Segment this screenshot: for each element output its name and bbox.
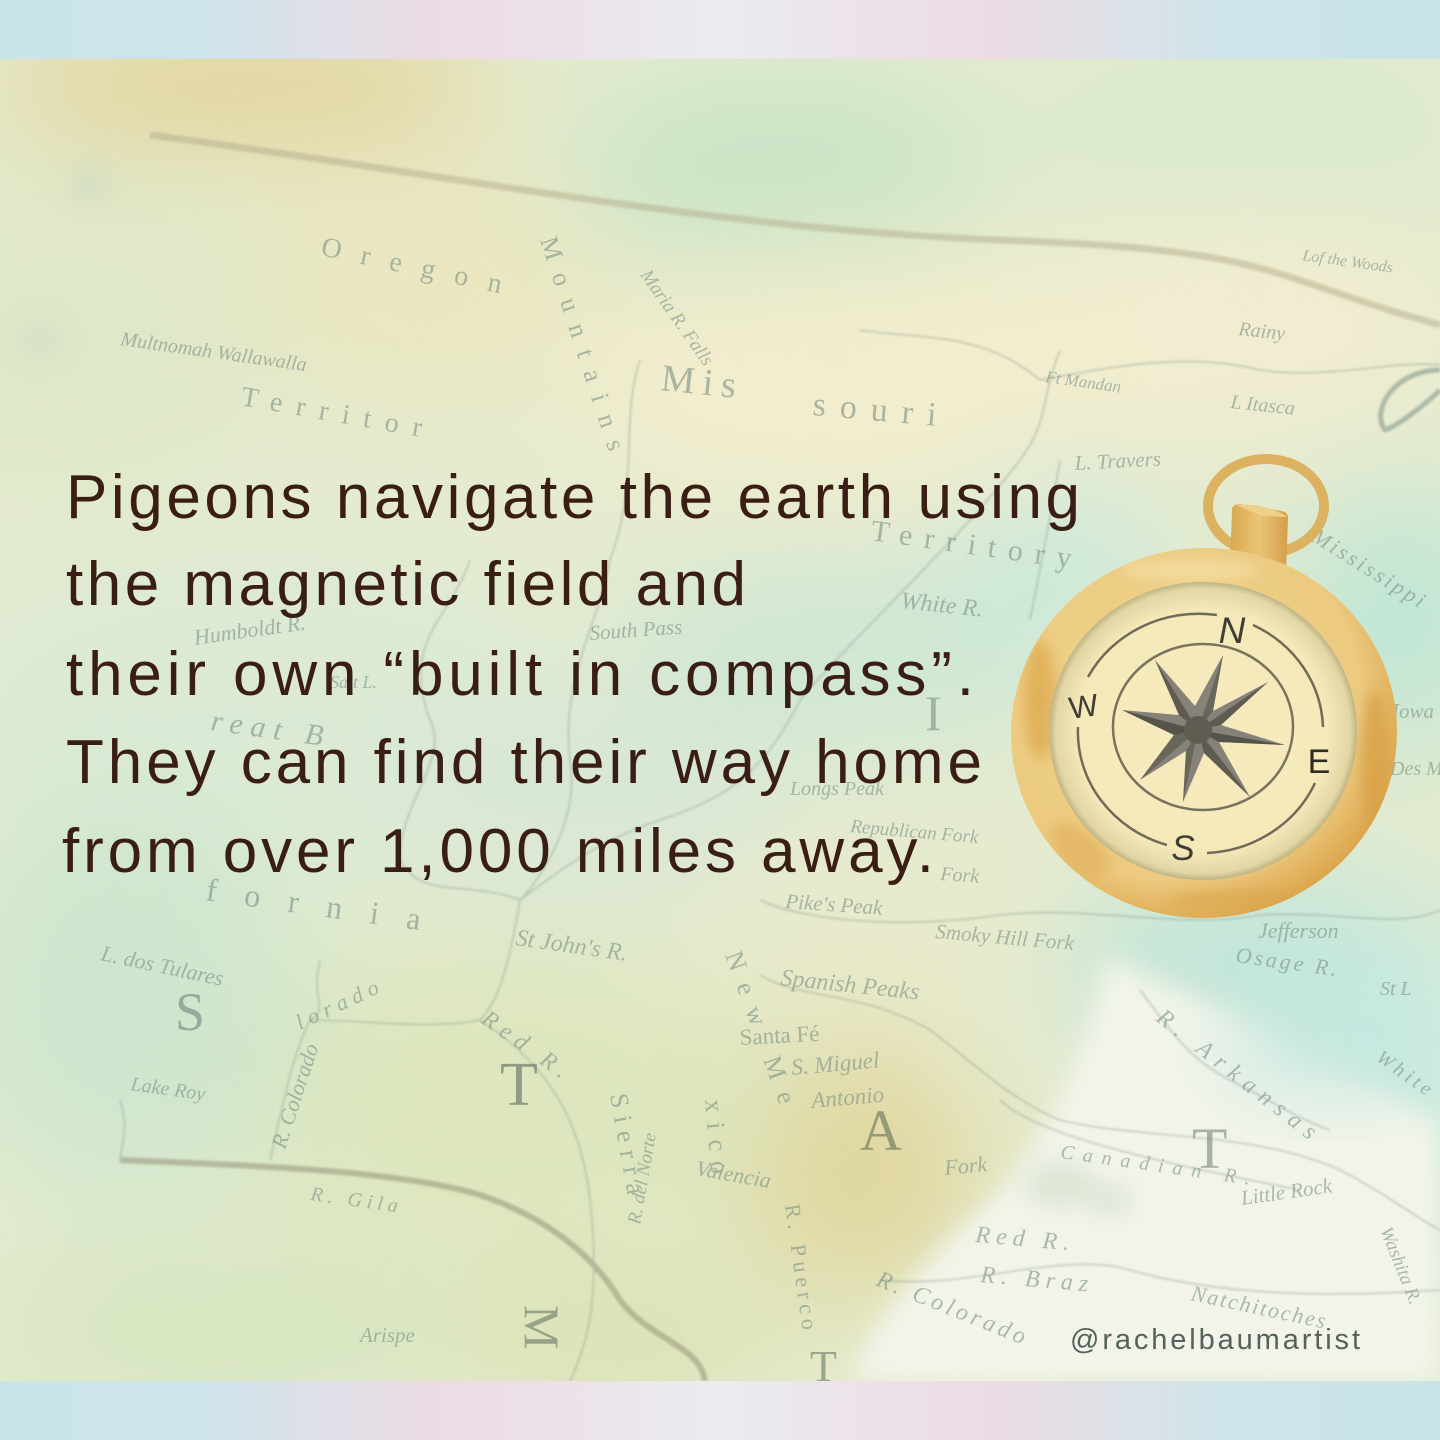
bottom gradient band xyxy=(0,1381,1440,1440)
map labels: R. Puerco xyxy=(780,1202,823,1336)
map labels: Salt L. xyxy=(330,672,377,692)
main text block: their own “built in compass”. xyxy=(66,640,974,709)
map labels: L Itasca xyxy=(1228,391,1296,420)
compass ring xyxy=(1208,459,1324,553)
map labels: Smoky Hill Fork xyxy=(935,919,1076,955)
map labels: S. Miguel xyxy=(790,1047,880,1080)
artist credit: @rachelbaumartist xyxy=(1070,1324,1360,1356)
map labels: Sierra xyxy=(604,1091,652,1204)
map labels: Santa Fé xyxy=(739,1021,820,1050)
map labels: I xyxy=(925,685,942,741)
map labels: R. Braz xyxy=(978,1262,1095,1298)
map labels: Maria R. Falls xyxy=(635,265,718,370)
map labels: R. Colorado xyxy=(266,1040,323,1152)
map labels: Ft Mandan xyxy=(1043,367,1122,397)
map labels: Mountains xyxy=(534,233,635,467)
map labels: T xyxy=(810,1342,837,1391)
compass case xyxy=(999,535,1409,931)
map labels: S xyxy=(175,982,205,1042)
map labels: Antonio xyxy=(808,1082,885,1113)
compass letter W: W xyxy=(1067,687,1101,726)
map labels: Washita R. xyxy=(1375,1224,1425,1308)
map labels: M xyxy=(514,1305,570,1349)
compass stem xyxy=(1230,504,1288,570)
map labels: Natchitoches xyxy=(1188,1280,1330,1334)
map labels xyxy=(98,232,1440,1391)
map labels: Pike's Peak xyxy=(784,889,884,920)
map labels: Canadian R. xyxy=(1059,1141,1261,1191)
top gradient band xyxy=(0,0,1440,59)
map labels: R. del Norte xyxy=(624,1131,661,1227)
compass case mottling xyxy=(1024,560,1389,910)
map labels: Mississippi xyxy=(1307,523,1433,614)
map labels: xico xyxy=(699,1098,735,1185)
map labels: Lof the Woods xyxy=(1300,247,1394,277)
compass letter N: N xyxy=(1219,610,1246,651)
map labels: South Pass xyxy=(589,615,683,645)
map labels: reat B xyxy=(209,704,333,754)
compass inner circle xyxy=(1113,644,1293,810)
white paper wash xyxy=(850,955,1440,1381)
main text block: They can find their way home xyxy=(66,728,982,797)
map labels: T xyxy=(500,1051,538,1119)
map labels: Multnomah Wallawalla xyxy=(118,328,308,376)
map labels: Humboldt R. xyxy=(191,610,307,650)
map labels: St John's R. xyxy=(514,925,629,967)
map labels: R. Arkansas xyxy=(1151,1004,1328,1150)
main text block: the magnetic field and xyxy=(66,550,746,619)
compass face xyxy=(1049,582,1357,880)
map labels: Red R. xyxy=(476,1005,578,1088)
map labels: R. Colorado xyxy=(872,1266,1033,1352)
map labels: A xyxy=(860,1098,902,1163)
map labels: fornia xyxy=(204,871,451,941)
compass letter E: E xyxy=(1308,743,1330,781)
map labels: St L xyxy=(1380,978,1412,1000)
main text block xyxy=(62,463,1080,886)
main text block: Pigeons navigate the earth using xyxy=(66,463,1080,532)
compass track xyxy=(1078,614,1323,853)
map labels: souri xyxy=(811,386,952,435)
map labels: Spanish Peaks xyxy=(779,965,921,1006)
map labels: Oregon xyxy=(319,232,525,304)
compass letter S: S xyxy=(1171,829,1195,868)
map labels: Iowa xyxy=(1391,699,1434,723)
map labels: Valencia xyxy=(694,1155,773,1193)
map labels: Little Rock xyxy=(1238,1173,1334,1210)
map labels: Longs Peak xyxy=(789,778,885,800)
map labels: New Me xyxy=(719,947,806,1121)
map labels: Lake Roy xyxy=(128,1073,207,1105)
map labels: Fork xyxy=(939,863,981,888)
map labels: R. Gila xyxy=(308,1183,404,1218)
map labels: Osage R. xyxy=(1234,942,1341,982)
map labels: White xyxy=(1372,1046,1439,1102)
map labels: Arispe xyxy=(358,1323,415,1347)
map labels: Rainy xyxy=(1236,318,1286,345)
map labels: Red R. xyxy=(973,1222,1076,1257)
map labels: Territor xyxy=(239,381,438,446)
icon: brass compass xyxy=(999,459,1409,931)
map labels: L. dos Tulares xyxy=(98,940,226,991)
map labels: L. Travers xyxy=(1073,447,1162,475)
map labels: Territory xyxy=(869,514,1086,577)
map labels: T xyxy=(1192,1116,1227,1181)
map labels: Republican Fork xyxy=(849,816,980,848)
map labels: Mis xyxy=(659,357,746,408)
map rivers and borders xyxy=(120,135,1440,1381)
compass rose xyxy=(1122,655,1285,802)
map labels: Fork xyxy=(942,1151,989,1180)
map labels: lorado xyxy=(292,972,388,1035)
map labels: White R. xyxy=(899,588,984,623)
map labels: Jefferson xyxy=(1258,918,1339,943)
main text block: from over 1,000 miles away. xyxy=(62,817,934,886)
